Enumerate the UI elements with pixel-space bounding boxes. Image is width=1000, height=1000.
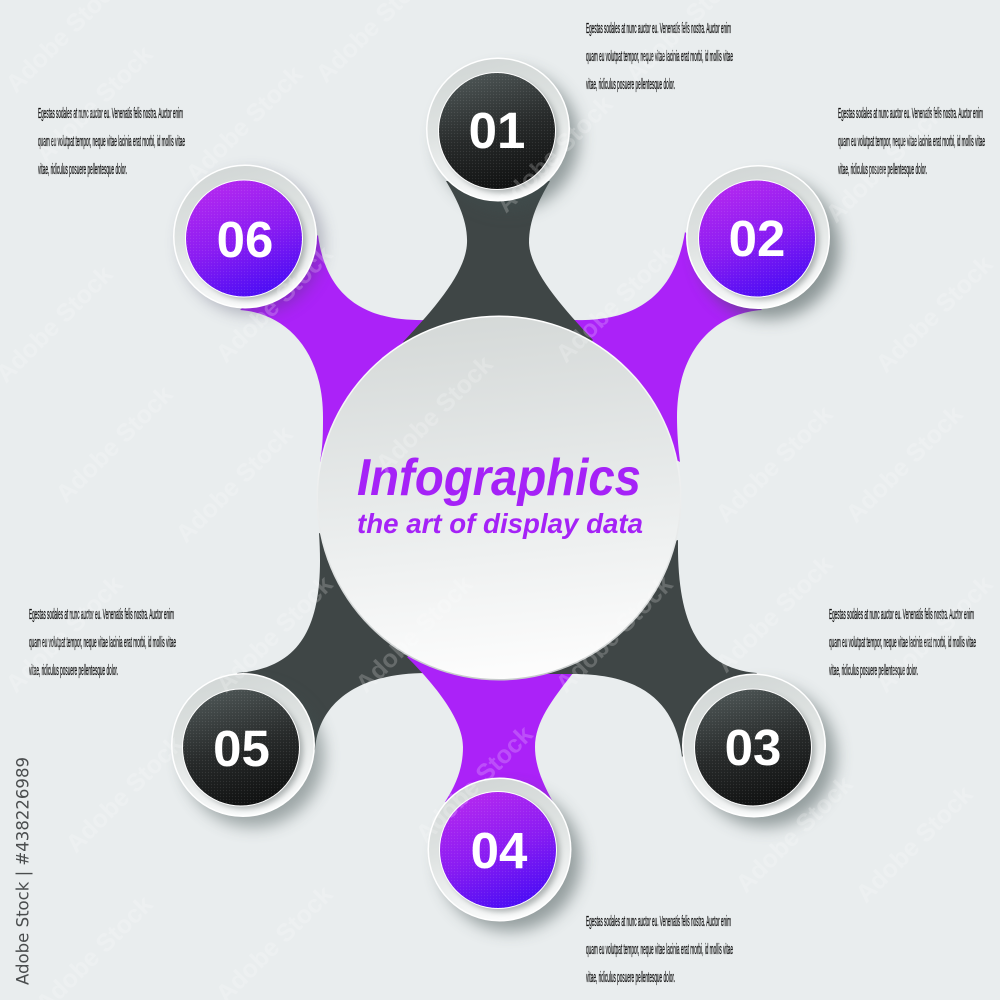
stock watermarks: Adobe Stock	[210, 240, 338, 368]
connector arm 03	[500, 540, 757, 757]
text block top: vitae, ridiculus posuere pellentesque dolor.	[586, 76, 675, 93]
stock watermarks: Adobe Stock	[710, 550, 838, 678]
badge 03	[682, 674, 836, 827]
text block bottom	[586, 913, 733, 986]
text: quam eu volutpat tempor, neque vitae lacinia erat morbi, id mollis vitae	[38, 133, 185, 150]
stock watermarks: Adobe Stock	[210, 570, 338, 698]
text block left lower: vitae, ridiculus posuere pellentesque dolor.	[29, 662, 118, 679]
stock watermarks: Adobe Stock	[50, 380, 178, 508]
badge 03: 03	[725, 719, 781, 776]
badge 02: 02	[729, 210, 785, 267]
connector arm 05	[237, 533, 499, 750]
connector arm 04	[407, 600, 573, 802]
text block left lower	[29, 606, 176, 679]
badge 06	[173, 164, 323, 314]
stock watermarks: Adobe Stock	[0, 570, 128, 698]
stock watermarks: Adobe Stock	[370, 350, 498, 478]
text block left upper: vitae, ridiculus posuere pellentesque dolor.	[38, 161, 127, 178]
stock watermarks: Adobe Stock	[410, 720, 538, 848]
badge 05: 05	[213, 720, 270, 777]
badge 02	[686, 165, 840, 319]
text block right upper	[838, 105, 985, 178]
badge 05	[171, 673, 324, 827]
stock watermarks: Adobe Stock	[350, 570, 478, 698]
stock watermarks: Adobe Stock	[170, 420, 298, 548]
stock watermarks: Adobe Stock	[60, 730, 188, 858]
stock watermarks: Adobe Stock	[710, 400, 838, 528]
badge 01	[426, 58, 579, 211]
stock id label: Adobe Stock | #438226989	[14, 757, 34, 985]
stock watermarks: Adobe Stock	[870, 570, 998, 698]
badge 06: 06	[217, 211, 273, 268]
stock watermarks: Adobe Stock	[550, 570, 678, 698]
text block left upper	[38, 105, 185, 178]
text: Egestas sodales at nunc auctor eu. Venenatis felis nostra. Auctor enim	[29, 606, 174, 623]
connector arm 02	[573, 232, 762, 462]
badge 04: 04	[471, 822, 528, 879]
badge 04	[428, 778, 581, 931]
text: Egestas sodales at nunc auctor eu. Venenatis felis nostra. Auctor enim	[38, 105, 183, 122]
stock watermarks: Adobe Stock	[30, 40, 158, 168]
stock watermarks: Adobe Stock	[550, 240, 678, 368]
subtitle: the art of display data	[357, 508, 643, 539]
connector arm 01	[403, 181, 593, 420]
stock watermarks: Adobe Stock	[180, 60, 308, 188]
stock watermarks: Adobe Stock	[730, 770, 858, 898]
stock watermarks: Adobe Stock	[870, 250, 998, 378]
stock watermarks: Adobe Stock	[820, 100, 948, 228]
badge 01: 01	[469, 102, 525, 159]
stock watermarks: Adobe Stock	[850, 780, 978, 908]
stock watermarks: Adobe Stock	[490, 90, 618, 218]
text block top	[586, 20, 733, 93]
connector arm 06	[240, 235, 427, 462]
text block bottom: vitae, ridiculus posuere pellentesque dolor.	[586, 969, 675, 986]
text block right lower	[829, 606, 976, 679]
title: Infographics	[357, 449, 641, 507]
stock watermarks: Adobe Stock	[840, 400, 968, 528]
text: quam eu volutpat tempor, neque vitae lacinia erat morbi, id mollis vitae	[29, 634, 176, 651]
central circle	[316, 316, 682, 680]
